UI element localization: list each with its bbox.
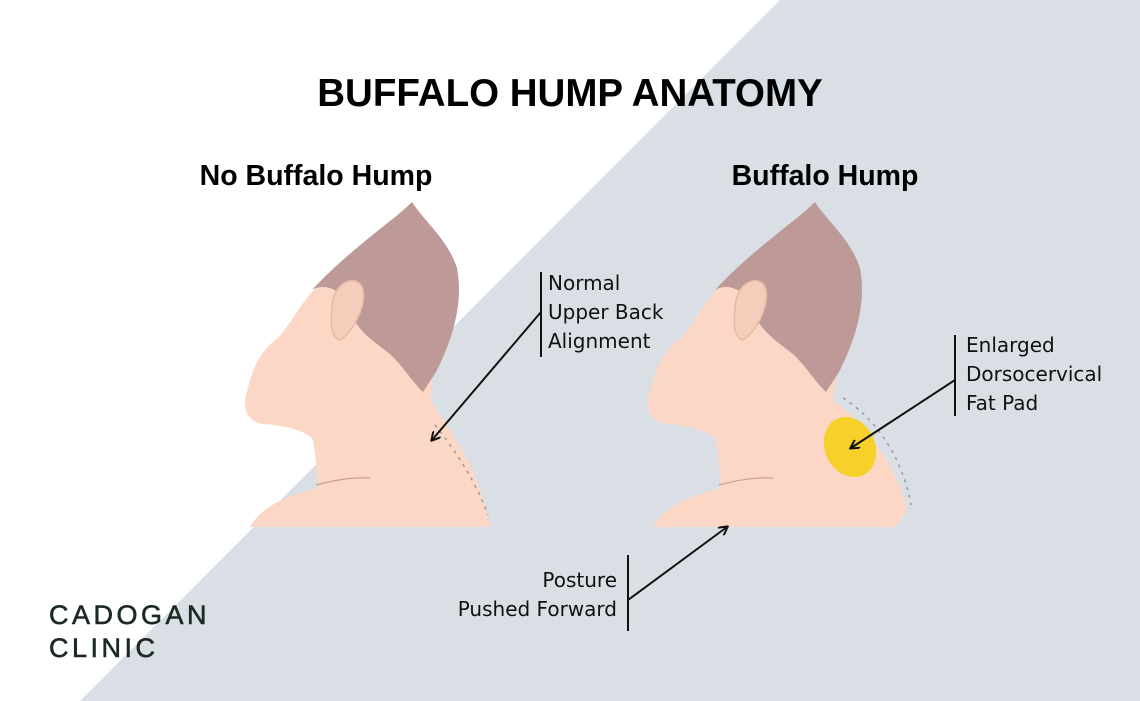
annotation: fat pad: Dorsocervical <box>966 362 1102 386</box>
logo: CADOGAN <box>49 600 210 630</box>
annotation: posture: Pushed Forward <box>458 597 617 621</box>
title: BUFFALO HUMP ANATOMY <box>317 72 823 115</box>
annotation: normal alignment <box>432 271 664 440</box>
annotation: normal alignment: Normal <box>548 271 620 295</box>
illustration: normal neck <box>245 202 490 527</box>
annotation: posture: Posture <box>542 568 617 592</box>
annotation: posture <box>458 527 727 631</box>
illustration: buffalo hump neck <box>648 202 911 530</box>
subheading: buffalo hump: Buffalo Hump <box>732 160 918 192</box>
subheading: no buffalo hump: No Buffalo Hump <box>200 160 432 192</box>
fat pad ellipse <box>814 408 886 486</box>
annotation: fat pad <box>851 333 1102 448</box>
annotation: normal alignment: Alignment <box>548 329 651 353</box>
annotation: fat pad: Fat Pad <box>966 391 1038 415</box>
annotation: fat pad: Enlarged <box>966 333 1055 357</box>
annotation: normal alignment: Upper Back <box>548 300 664 324</box>
logo <box>49 600 210 663</box>
logo: CLINIC <box>49 633 159 663</box>
